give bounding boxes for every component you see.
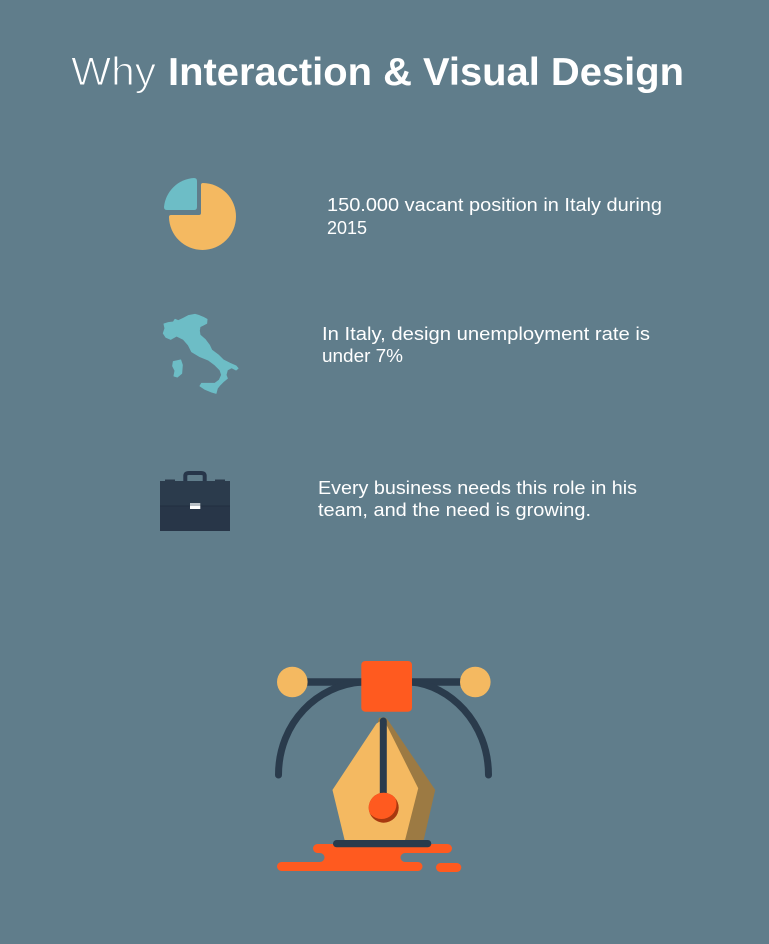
right handle: [460, 667, 491, 697]
bezier curves: [278, 682, 488, 775]
ink puddle: [277, 844, 461, 872]
text: vacant positions: 150.000 vacant position in Italy during: [327, 195, 662, 215]
icon: pie chart: [164, 178, 236, 250]
icon: briefcase: [160, 473, 230, 531]
bezier handle line: [292, 678, 475, 686]
nib shadow: [380, 718, 435, 840]
nib hole: [369, 793, 399, 823]
base bar: [333, 840, 431, 847]
nib slit: [380, 721, 387, 795]
left handle: [277, 667, 308, 697]
text: unemployment rate: In Italy, design unemployment rate is: [322, 324, 650, 344]
nib hole highlight: [368, 792, 396, 819]
text: unemployment rate: under 7%: [322, 346, 403, 366]
nib front: [333, 720, 418, 840]
icon: map of Italy: [163, 314, 238, 393]
icon: pen tool: [277, 661, 491, 872]
text: business need: [318, 478, 637, 520]
text: unemployment rate: [322, 324, 650, 366]
text: vacant positions: [327, 195, 662, 238]
anchor square: [361, 661, 412, 712]
title: Why: [71, 50, 156, 94]
text: vacant positions: 2015: [327, 218, 367, 238]
title: Interaction & Visual Design: [168, 51, 684, 94]
text: business need: Every business needs this role in his: [318, 478, 637, 498]
text: business need: team, and the need is growing.: [318, 500, 591, 520]
